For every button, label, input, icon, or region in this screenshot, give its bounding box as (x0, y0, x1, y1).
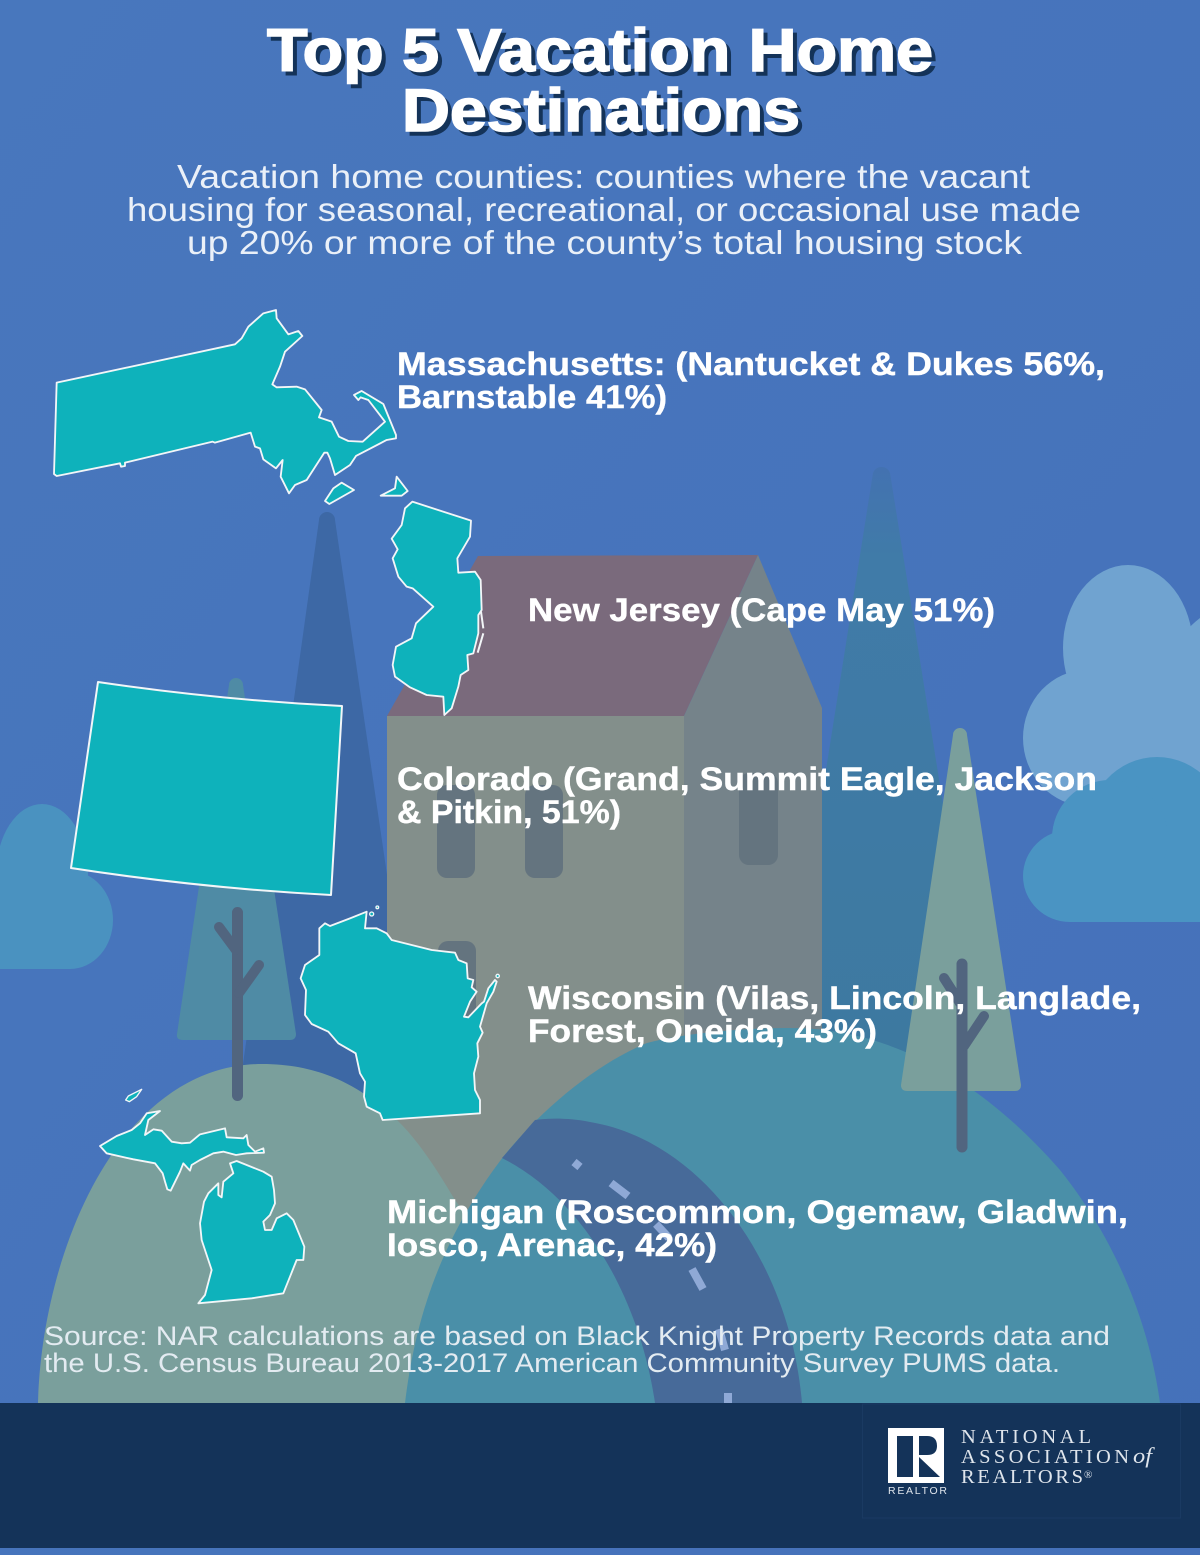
hill: left (38, 1064, 500, 1403)
tree: small left (177, 678, 296, 1040)
label: Massachusetts: Barnstable 41%) (397, 379, 667, 415)
Martha's Vineyard (325, 483, 354, 504)
windows (437, 773, 778, 1021)
house front wall (387, 716, 684, 1216)
label: Michigan: Michigan (Roscommon, Ogemaw, Gladwin, (387, 1194, 1128, 1230)
organization name: REALTORS (961, 1466, 1083, 1488)
organization name: of (1133, 1443, 1155, 1468)
map: Massachusetts (54, 310, 408, 504)
map: Wisconsin (301, 906, 499, 1120)
icon: R block (888, 1428, 944, 1483)
house roof (387, 555, 758, 716)
cloud: upper right (1023, 565, 1200, 840)
REALTOR mark: REALTOR (888, 1485, 947, 1497)
title: Destinations (402, 77, 800, 144)
source note: Source: NAR calculations are based on Black Knight Property Records data and (44, 1321, 1110, 1351)
cloud: left (0, 804, 113, 969)
label: Colorado: Colorado (Grand, Summit Eagle, Jackson (397, 761, 1097, 797)
source note: the U.S. Census Bureau 2013-2017 American Community Survey PUMS data. (44, 1348, 1060, 1378)
barrier islands (478, 612, 483, 653)
hill: right (405, 1028, 1160, 1403)
house (387, 555, 822, 1216)
source note (44, 1321, 1110, 1378)
illustration: landscape (0, 467, 1200, 1403)
subtitle (127, 158, 1081, 261)
label: Colorado: & Pitkin, 51%) (397, 794, 621, 830)
logo: National Association of Realtors (862, 1404, 1180, 1518)
title (267, 17, 937, 148)
organization name (961, 1426, 1155, 1488)
tree trunk: right (944, 964, 984, 1147)
tree: small right (901, 728, 1021, 1091)
label: Michigan: Iosco, Arenac, 42%) (387, 1227, 717, 1263)
road dashes (574, 1162, 728, 1403)
title: Destinations (406, 81, 804, 148)
lower peninsula (198, 1161, 304, 1303)
tree: tall dark left (238, 512, 420, 1100)
organization name: ® (1084, 1469, 1092, 1481)
label: Wisconsin: Forest, Oneida, 43%) (528, 1013, 877, 1049)
title: Top 5 Vacation Home (271, 21, 937, 88)
Nantucket (381, 477, 408, 496)
label: Colorado (397, 761, 1097, 830)
label: New Jersey: New Jersey (Cape May 51%) (528, 592, 995, 628)
tree: tall right (780, 467, 984, 1060)
subtitle: Vacation home counties: counties where the vacant (177, 158, 1030, 195)
footer band (0, 1403, 1200, 1548)
cloud: lower right (1023, 757, 1200, 922)
Wisconsin islands (370, 906, 499, 978)
label: Wisconsin: Wisconsin (Vilas, Lincoln, Langlade, (528, 980, 1141, 1016)
label: Wisconsin (528, 980, 1141, 1049)
map: New Jersey (392, 502, 483, 715)
organization name: NATIONAL (961, 1426, 1091, 1448)
title: Top 5 Vacation Home (267, 17, 933, 84)
subtitle: up 20% or more of the county’s total housing stock (187, 224, 1023, 261)
organization name: ASSOCIATION (961, 1446, 1129, 1468)
map: Michigan (100, 1089, 304, 1303)
road (502, 1119, 802, 1403)
tree trunk: left (219, 912, 259, 1096)
house side wall (684, 555, 822, 1216)
map: Colorado (71, 682, 342, 895)
label: Massachusetts (397, 346, 1105, 415)
logo backing panel (862, 1404, 1180, 1518)
subtitle: housing for seasonal, recreational, or occasional use made (127, 191, 1081, 228)
label: Michigan (387, 1194, 1128, 1263)
Isle Royale (126, 1089, 142, 1102)
label: Massachusetts: Massachusetts: (Nantucket & Dukes 56%, (397, 346, 1105, 382)
